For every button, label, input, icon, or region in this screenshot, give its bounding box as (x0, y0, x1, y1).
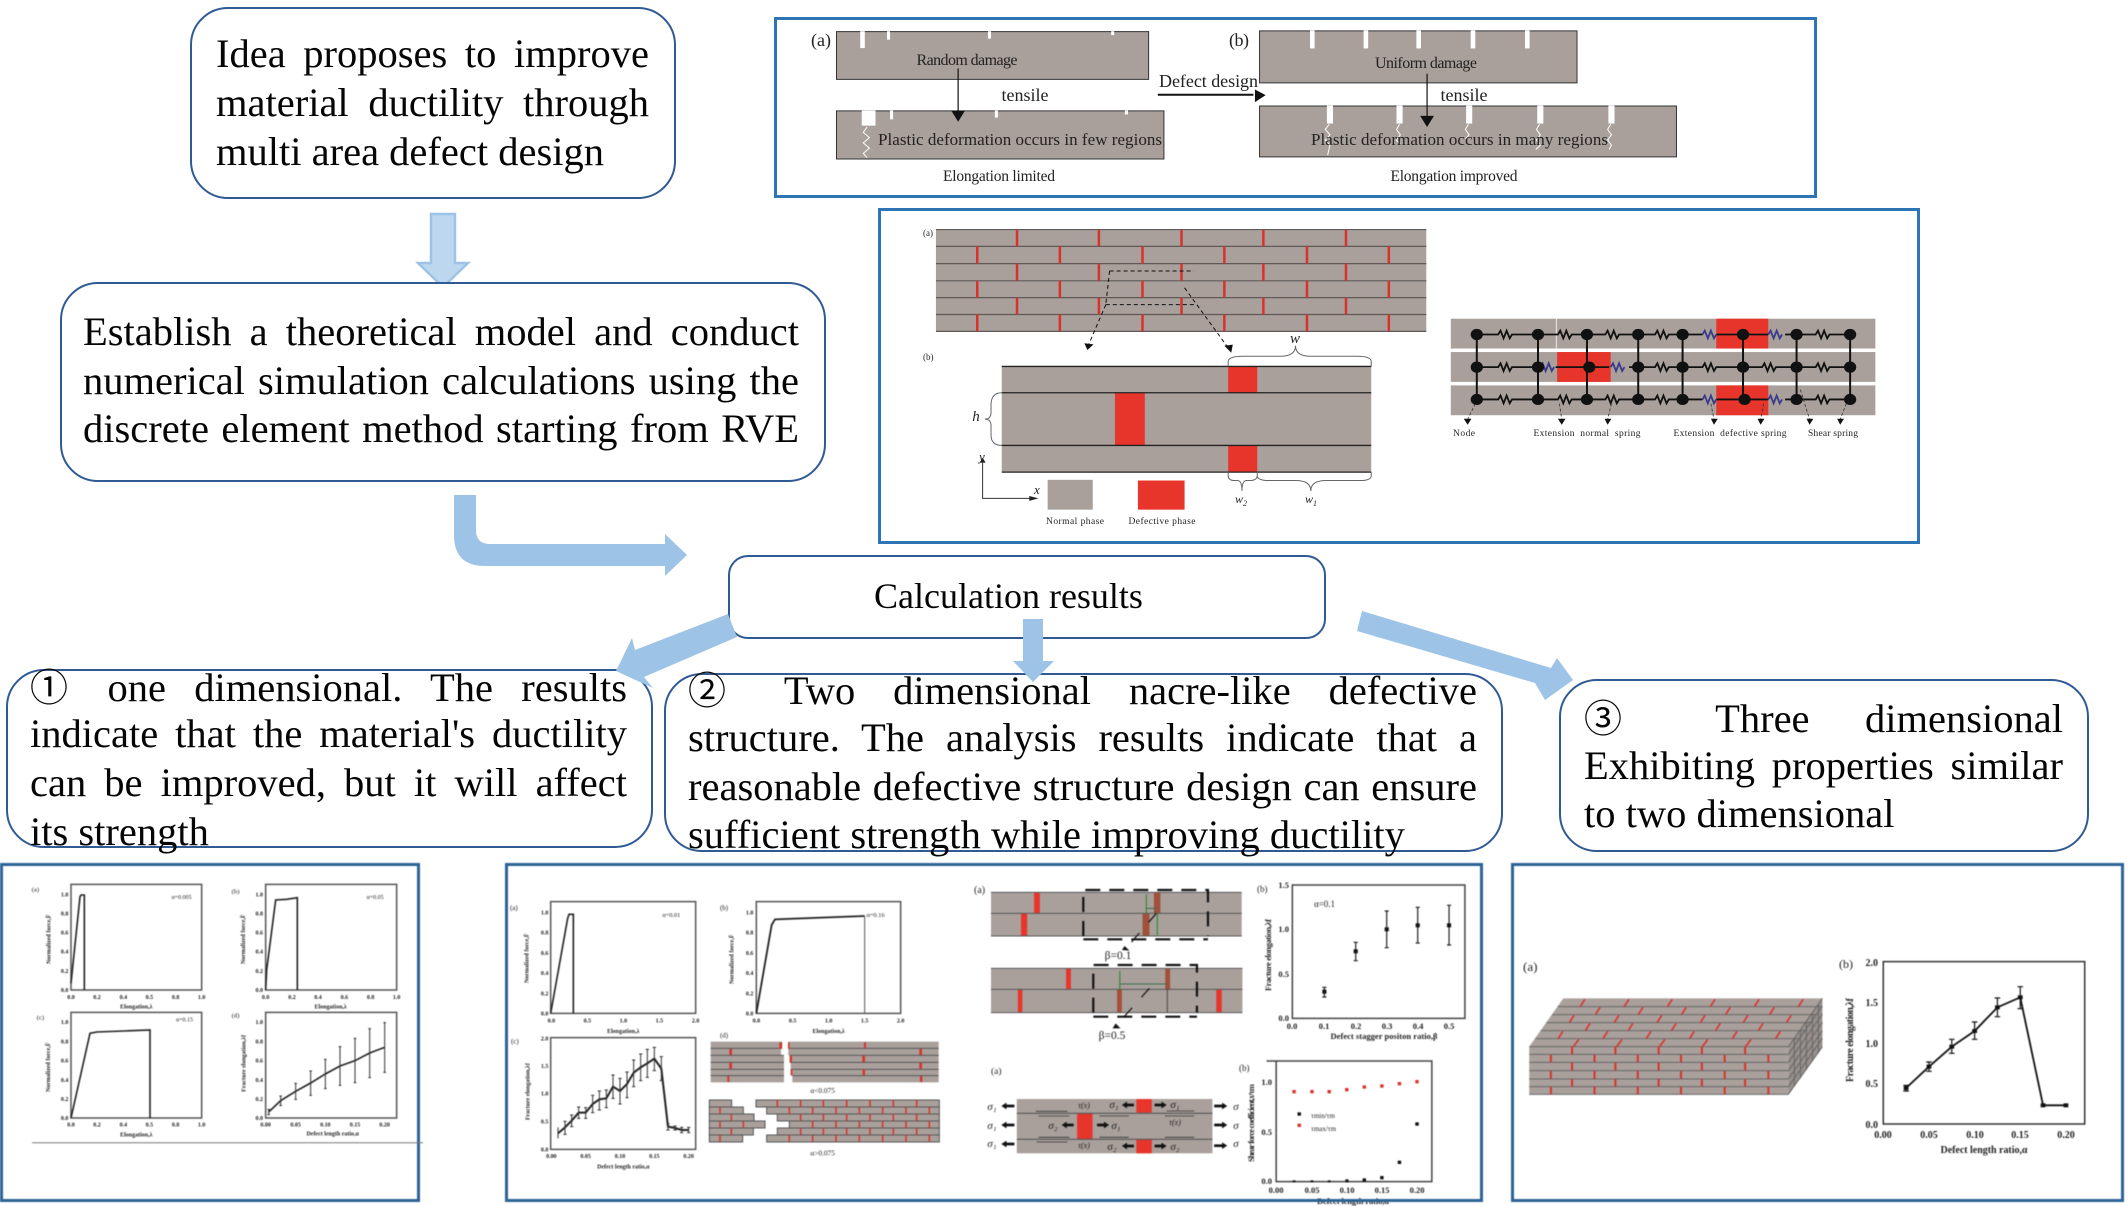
labels: RVE and spring diagrams: h (972, 409, 980, 425)
chart: force curve (a): 0.2 (93, 995, 101, 1001)
chart: fracture elongation (c): 0.00 (546, 1154, 557, 1160)
panel: defect design schematic (774, 17, 1817, 198)
labels: RVE and spring diagrams: 1 (1313, 499, 1317, 508)
arrow: idea to theoretical model (415, 212, 471, 282)
chart: fracture elongation (d): 0.20 (379, 1123, 390, 1129)
text box: two dimensional: ② Two dimensional nacre-like defective (688, 660, 1477, 715)
text box: theoretical model: discrete element method starting from RVE (83, 406, 799, 451)
labels: RVE and spring diagrams (923, 228, 1858, 527)
chart: fracture elongation (c): 2.0 (541, 1036, 548, 1042)
chart: force curve (b): 0.8 (367, 995, 374, 1001)
chart: force curve (b): 0.6 (256, 931, 263, 937)
chart: fracture elongation versus stagger ratio: Defect stagger positon ratio,β (1330, 1031, 1438, 1041)
chart: fracture elongation (d): 0.0 (256, 1116, 263, 1122)
chart: force curve (c): 0.0 (67, 1123, 75, 1129)
labels: defect design schematic: Elongation improved (1390, 168, 1518, 185)
chart: force curve (a): 1.0 (620, 1018, 627, 1024)
text box: three dimensional: to two dimensional (1584, 791, 1894, 836)
chart: force curve (a): 0.5 (584, 1018, 591, 1024)
chart: force curve (c): 0.8 (61, 1039, 68, 1045)
chart: force curve (a): 0.4 (61, 950, 68, 956)
labels: RVE and spring diagrams: Node (1453, 429, 1475, 439)
chart: fracture elongation (c): 0.15 (649, 1154, 660, 1160)
arrow: results to two dimensional (1013, 619, 1054, 682)
chart: force curve (c): α=0.15 (176, 1018, 193, 1024)
chart: fracture elongation (d): 0.2 (256, 1097, 263, 1103)
chart: force curve (a): 0.0 (67, 995, 75, 1001)
chart: fracture elongation (c): 0.20 (683, 1154, 694, 1160)
chart: fracture elongation versus stagger ratio: 0.5 (1278, 969, 1289, 979)
chart: fracture elongation versus defect length: (b) (1839, 957, 1853, 971)
text box: two dimensional: reasonable defective structure design can ensure (688, 764, 1477, 809)
text box: three dimensional: Exhibiting properties similar (1584, 743, 2063, 788)
text box: theoretical model: Establish a theoretical model and conduct (83, 309, 799, 354)
chart: fracture elongation (d): 0.6 (256, 1059, 263, 1065)
chart: fracture elongation versus defect length: 1.0 (1866, 1039, 1878, 1050)
chart: fracture elongation versus defect length: 0.0 (1866, 1120, 1878, 1131)
chart: force curve (b): 0.4 (314, 995, 322, 1001)
chart: force curve (a): 0.0 (541, 1011, 548, 1017)
chart: force curve (b): α=0.05 (367, 895, 384, 901)
chart: shear force coefficient: 0.5 (1261, 1127, 1272, 1137)
labels: RVE and spring diagrams: w (1235, 492, 1243, 506)
chart: fracture elongation (c): 0.0 (541, 1147, 548, 1153)
chart: force curve (b): 1.0 (256, 892, 263, 898)
labels: defect design schematic: Uniform damage (1375, 55, 1477, 72)
labels: RVE and spring diagrams: Extension normal spring (1534, 429, 1641, 439)
labels: defect design schematic: (a) (811, 30, 831, 51)
chart: shear force coefficient: Shear force coefficient,τ/τm (1246, 1084, 1256, 1162)
chart: force curve (a): (a) (510, 904, 518, 912)
chart: fracture elongation versus stagger ratio: 0.5 (1444, 1021, 1454, 1031)
chart: force curve (b): (b) (232, 888, 239, 895)
chart: fracture elongation (c): 0.10 (615, 1154, 625, 1160)
chart: fracture elongation (c): (c) (511, 1038, 519, 1046)
chart: force curve (b): 0.2 (746, 991, 753, 997)
diagram: shear lag stress: τ(x) (1078, 1101, 1090, 1110)
chart: fracture elongation versus stagger ratio: 0.0 (1278, 1013, 1289, 1023)
chart: fracture elongation (d): 0.15 (350, 1123, 360, 1129)
chart: fracture elongation (c) (511, 1036, 696, 1171)
text box: idea (190, 7, 676, 199)
chart: force curve (b): 0.8 (256, 911, 263, 917)
chart: fracture elongation versus defect length: 0.00 (1874, 1130, 1892, 1141)
chart: fracture elongation versus stagger ratio: 0.2 (1351, 1021, 1361, 1031)
chart: shear force coefficient: 0.00 (1269, 1185, 1283, 1195)
chart: force curve (a): Normalized force,F̄ (523, 933, 530, 983)
chart: force curve (c): 0.4 (120, 1123, 127, 1129)
chart: shear force coefficient (1239, 1061, 1432, 1206)
labels: RVE and spring diagrams: Defective phase (1128, 516, 1196, 527)
chart: force curve (b): Normalized force,F̄ (240, 914, 247, 964)
chart: force curve (b): 0.4 (256, 950, 263, 956)
labels: RVE and spring diagrams: (b) (923, 352, 934, 362)
chart: force curve (a): α=0.01 (662, 912, 680, 919)
diagram: shear lag stress: σ₂ (1170, 1141, 1180, 1153)
chart: fracture elongation (d): (d) (232, 1013, 239, 1020)
chart: force curve (b): 0.0 (746, 1011, 753, 1017)
chart: force curve (a): 0.5 (146, 995, 153, 1001)
chart: force curve (a): 0.8 (61, 911, 68, 917)
chart: force curve (b) (720, 902, 904, 1035)
chart: shear force coefficient: 0.10 (1340, 1185, 1354, 1195)
chart: force curve (c): 1.0 (61, 1020, 68, 1026)
diagram: shear lag stress: σ (1233, 1101, 1239, 1113)
chart: force curve (b): 0.8 (746, 931, 753, 937)
panel: one dimensional results (0, 862, 424, 1203)
labels: RVE and spring diagrams: 2 (1243, 499, 1247, 508)
text box: calculation results (728, 555, 1326, 639)
chart: force curve (b) (232, 884, 400, 1011)
chart: fracture elongation versus defect length: 2.0 (1866, 958, 1878, 969)
chart: force curve (b): 0.2 (256, 969, 263, 975)
text box: two dimensional (664, 673, 1503, 852)
text box: three dimensional: ③ Three dimensional (1584, 688, 2063, 743)
labels: RVE and spring diagrams: x (1033, 482, 1040, 497)
chart: fracture elongation versus stagger ratio: α=0.1 (1314, 899, 1335, 909)
chart: fracture elongation versus stagger ratio: 0.4 (1413, 1021, 1424, 1031)
panel: three dimensional results: (a) (1523, 959, 1537, 974)
chart: force curve (a): Normalized force,F̄ (45, 914, 52, 964)
text box: one dimensional: indicate that the material's ductility (30, 711, 627, 756)
chart: fracture elongation versus stagger ratio: (b) (1257, 884, 1268, 894)
chart: force curve (c) (37, 1012, 205, 1138)
diagram: stagger ratio bricks (991, 890, 1242, 1028)
labels: stagger ratio bricks: (a) (974, 885, 985, 896)
chart: force curve (c): 1.0 (198, 1123, 205, 1129)
chart: fracture elongation (c): Fracture elongation,λf (526, 1062, 532, 1120)
labels: stagger ratio bricks: β=0.1 (1105, 950, 1132, 962)
chart: force curve (a): 1.0 (198, 995, 205, 1001)
chart: fracture elongation versus stagger ratio: 1.5 (1278, 880, 1289, 890)
panel: two dimensional results (504, 862, 1484, 1206)
chart: shear force coefficient: 0.20 (1410, 1185, 1424, 1195)
diagram: RVE enlarged with defective phase (980, 346, 1371, 510)
labels: RVE and spring diagrams: Normal phase (1046, 517, 1104, 527)
labels: defect design schematic: (b) (1229, 30, 1249, 51)
chart: fracture elongation versus defect length: Defect length ratio,α (1940, 1145, 2028, 1156)
chart: fracture elongation (d): 0.05 (290, 1123, 301, 1129)
arrow: results to one dimensional (616, 614, 737, 688)
labels: defect design schematic: Random damage (916, 52, 1018, 69)
diagram: spring network (1451, 319, 1875, 425)
labels: defect design schematic: Elongation limited (943, 168, 1055, 185)
chart: force curve (b): 0.0 (753, 1018, 760, 1024)
diagram: nacre-like brick structure (936, 230, 1426, 353)
chart: force curve (c): 0.4 (61, 1078, 68, 1084)
chart: force curve (b): 1.0 (393, 995, 400, 1001)
text box: one dimensional: its strength (30, 809, 209, 854)
text box: one dimensional (6, 669, 653, 848)
labels: defect design schematic (811, 30, 1608, 185)
diagram: shear lag stress: (a) (991, 1066, 1002, 1077)
labels: defect design schematic: Plastic deformation occurs in many regions (1311, 130, 1608, 149)
diagram: shear lag stress: σ₁ (987, 1138, 997, 1150)
panel: RVE model and discrete element springs (878, 208, 1920, 544)
panel: three dimensional results (1510, 862, 2125, 1203)
chart: shear force coefficient: 1.0 (1261, 1077, 1272, 1087)
chart: force curve (a): Elongation,λ (607, 1029, 640, 1035)
chart: fracture elongation (d) (232, 1012, 397, 1138)
chart: shear force coefficient: 0.15 (1375, 1185, 1389, 1195)
chart: force curve (b): 2.0 (897, 1018, 904, 1024)
chart: fracture elongation versus defect length (1839, 957, 2085, 1156)
chart: force curve (b): 1.0 (746, 910, 753, 916)
labels: defect design schematic: tensile (1002, 85, 1048, 105)
chart: force curve (a): 0.6 (541, 951, 548, 957)
chart: force curve (c): 0.6 (61, 1059, 68, 1065)
chart: fracture elongation versus defect length: 0.05 (1920, 1130, 1938, 1141)
chart: force curve (b): α=0.16 (867, 912, 885, 919)
chart: fracture elongation (d): 1.0 (256, 1020, 263, 1026)
chart: fracture elongation (c): Defect length ratio,α (597, 1165, 650, 1171)
chart: fracture elongation versus stagger ratio: Fracture elongation,λf (1263, 919, 1273, 991)
chart: shear force coefficient: Defect length ratio,α (1317, 1196, 1389, 1206)
diagram: 3D brick block (1529, 998, 1822, 1094)
chart: fracture elongation (d): Defect length ratio,α (306, 1132, 359, 1138)
chart: force curve (a): Elongation,λ (120, 1005, 153, 1011)
chart: shear force coefficient: τmin/τm (1311, 1112, 1335, 1120)
chart: force curve (b): 0.6 (746, 951, 753, 957)
chart: force curve (a): 0.4 (541, 971, 548, 977)
chart: force curve (b): Elongation,λ (812, 1029, 845, 1035)
diagram: shear lag stress (987, 1066, 1239, 1153)
chart: fracture elongation versus defect length: 0.15 (2011, 1130, 2029, 1141)
labels: RVE and spring diagrams: Extension defective spring (1674, 428, 1787, 439)
diagram: shear lag stress: σ₁ (987, 1101, 997, 1113)
labels: stagger ratio bricks: β=0.5 (1099, 1030, 1126, 1042)
chart: force curve (c): 0.5 (146, 1123, 153, 1129)
chart: fracture elongation (c): 0.5 (541, 1120, 548, 1126)
text box: three dimensional (1559, 679, 2089, 852)
chart: force curve (a): α=0.005 (172, 895, 192, 901)
arrow: results to three dimensional (1357, 611, 1573, 700)
chart: force curve (b): 0.4 (746, 971, 753, 977)
chart: fracture elongation versus stagger ratio: 1.0 (1278, 924, 1289, 934)
chart: force curve (a): 0.8 (172, 995, 179, 1001)
chart: fracture elongation (d): 0.4 (256, 1078, 263, 1084)
chart: fracture elongation (c): 0.05 (580, 1154, 591, 1160)
text box: theoretical model (60, 282, 826, 482)
arrow: bent arrow to calculation results (454, 495, 687, 576)
chart: fracture elongation versus stagger ratio: 0.1 (1319, 1021, 1329, 1031)
labels: RVE and spring diagrams: w (1290, 331, 1300, 347)
chart: force curve (a): 0.8 (541, 931, 548, 937)
diagram: crack patterns (d): (d) (720, 1032, 729, 1040)
chart: force curve (c): (c) (37, 1014, 44, 1021)
diagram: crack patterns (d): α<0.075 (810, 1086, 835, 1095)
labels: RVE and spring diagrams: w (1305, 492, 1313, 506)
text box: theoretical model: numerical simulation calculations using the (83, 358, 799, 403)
chart: force curve (a): 0.0 (61, 988, 68, 994)
chart: shear force coefficient: τmax/τm (1311, 1125, 1337, 1133)
chart: fracture elongation versus stagger ratio (1257, 880, 1465, 1041)
diagram: shear lag stress: σ (1233, 1138, 1239, 1150)
diagram: shear lag stress: σ₁ (1109, 1099, 1119, 1111)
text box: two dimensional: sufficient strength while improving ductility (688, 812, 1405, 857)
chart: force curve (c): 0.2 (93, 1123, 101, 1129)
diagram: crack patterns (d): α>0.075 (810, 1149, 835, 1158)
chart: force curve (a) (510, 902, 699, 1035)
labels: RVE and spring diagrams: y (977, 449, 985, 464)
diagram: shear lag stress: σ₂ (1107, 1141, 1117, 1153)
chart: force curve (a): 0.4 (120, 995, 127, 1001)
chart: force curve (c): 0.8 (172, 1123, 179, 1129)
diagram: shear lag stress: τ(x) (1169, 1118, 1181, 1127)
chart: force curve (a): 1.0 (541, 910, 548, 916)
chart: fracture elongation versus stagger ratio: 0.0 (1287, 1021, 1297, 1031)
labels: stagger ratio bricks (974, 885, 1132, 1042)
chart: force curve (a): 1.0 (61, 892, 68, 898)
chart: force curve (b): (b) (720, 904, 729, 912)
chart: fracture elongation versus defect length: Fracture elongation,λf (1845, 997, 1856, 1082)
labels: RVE and spring diagrams: (a) (923, 228, 933, 238)
labels: RVE and spring diagrams: Shear spring (1808, 429, 1858, 439)
chart: force curve (b): 0.2 (288, 995, 296, 1001)
labels: defect design schematic: tensile (1440, 85, 1488, 105)
chart: force curve (a): (a) (32, 887, 39, 894)
chart: force curve (a): 0.2 (61, 969, 68, 975)
chart: fracture elongation versus defect length: 1.5 (1866, 998, 1878, 1009)
chart: force curve (a): 0.2 (541, 991, 548, 997)
chart: force curve (b): 0.6 (341, 995, 348, 1001)
chart: force curve (a) (32, 884, 205, 1011)
labels: defect design schematic: Defect design (1159, 71, 1258, 91)
diagram: shear lag stress: σ (1233, 1120, 1239, 1132)
chart: force curve (a): 1.5 (656, 1018, 663, 1024)
chart: fracture elongation (d): Fracture elongation,λf (241, 1034, 247, 1092)
text box: idea: Idea proposes to improve (216, 31, 649, 76)
text box: one dimensional: ① one dimensional. The results (30, 657, 627, 712)
chart: force curve (c): 0.2 (61, 1097, 68, 1103)
chart: fracture elongation (c): 1.0 (541, 1092, 548, 1098)
chart: fracture elongation (d): 0.8 (256, 1039, 263, 1045)
schematic: bars and notches (836, 31, 1676, 159)
chart: force curve (b): 1.0 (825, 1018, 832, 1024)
chart: force curve (b): Normalized force,F̄ (729, 934, 736, 984)
diagram: shear lag stress: τ(x) (1078, 1141, 1090, 1150)
text box: idea: material ductility through (216, 80, 649, 125)
chart: fracture elongation versus defect length: 0.20 (2057, 1130, 2075, 1141)
chart: force curve (c): Normalized force,F̄ (45, 1042, 52, 1092)
text box: one dimensional: can be improved, but it will affect (30, 760, 627, 805)
chart: force curve (b): 0.0 (256, 988, 263, 994)
diagram: shear lag stress: σ₁ (1111, 1120, 1121, 1132)
chart: fracture elongation (c): 1.5 (541, 1064, 548, 1070)
chart: fracture elongation versus stagger ratio: 0.3 (1382, 1021, 1392, 1031)
chart: fracture elongation (d): 0.00 (260, 1123, 271, 1129)
diagram: shear lag stress: σ₂ (1048, 1120, 1058, 1132)
chart: force curve (b): 0.0 (262, 995, 269, 1001)
diagram: shear lag stress: σ₁ (1170, 1099, 1180, 1111)
chart: force curve (b): 0.5 (789, 1018, 796, 1024)
chart: fracture elongation (d): 0.10 (320, 1123, 331, 1129)
text box: calculation results: Calculation results (874, 576, 1143, 616)
chart: force curve (b): 1.5 (861, 1018, 868, 1024)
diagram: crack patterns (d) (709, 1032, 939, 1158)
chart: force curve (a): 2.0 (692, 1018, 699, 1024)
chart: force curve (c): 0.0 (61, 1116, 68, 1122)
chart: force curve (b): Elongation,λ (314, 1005, 347, 1011)
chart: shear force coefficient: 0.05 (1305, 1185, 1319, 1195)
chart: force curve (a): 0.0 (548, 1018, 555, 1024)
labels: defect design schematic: Plastic deformation occurs in few regions (878, 130, 1162, 149)
text box: idea: multi area defect design (216, 129, 604, 174)
chart: force curve (c): Elongation,λ (120, 1132, 153, 1138)
chart: fracture elongation versus defect length: 0.5 (1866, 1079, 1878, 1090)
chart: force curve (a): 0.6 (61, 931, 68, 937)
diagram: shear lag stress: σ₁ (987, 1120, 997, 1132)
text box: two dimensional: structure. The analysis results indicate that a (688, 715, 1477, 760)
chart: shear force coefficient: 0.0 (1261, 1176, 1272, 1186)
chart: fracture elongation versus defect length: 0.10 (1966, 1130, 1984, 1141)
chart: shear force coefficient: (b) (1239, 1063, 1250, 1073)
